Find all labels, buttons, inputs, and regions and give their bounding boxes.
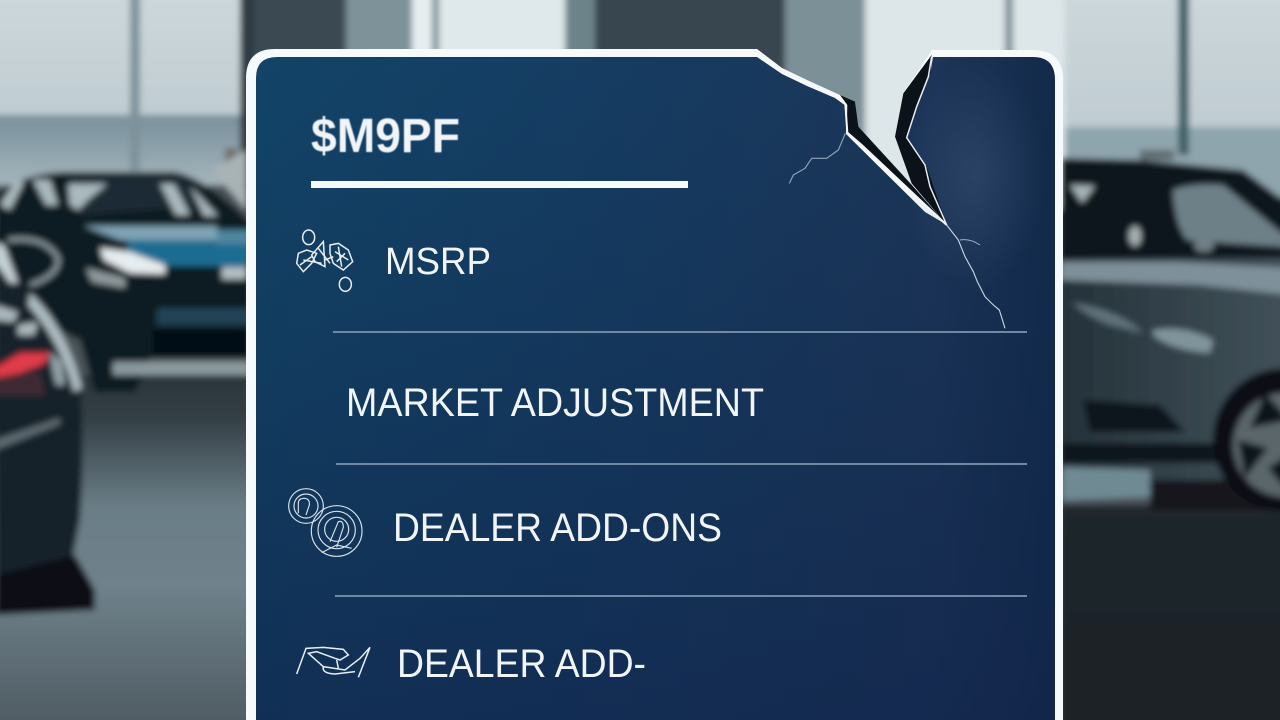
row: dealer add-ons <box>289 489 722 556</box>
title underline <box>311 181 688 188</box>
row: dealer add- (cut off) <box>297 642 646 686</box>
panel: price sheet card with torn corner <box>246 49 1063 720</box>
label: MSRP <box>385 241 491 283</box>
card white frame <box>246 49 1063 720</box>
row: market adjustment label: MARKET ADJUSTMENT <box>346 381 764 425</box>
title: $M9PF <box>311 110 460 163</box>
foreground car left <box>0 240 82 590</box>
icon: scribbled cluster <box>297 230 353 291</box>
label: DEALER ADD- <box>397 642 646 686</box>
card blue surface <box>256 57 1055 720</box>
icon: hand outline <box>297 647 370 677</box>
crack: dark torn edges and fine fractures <box>757 52 1005 328</box>
far car left <box>0 172 250 392</box>
right car <box>1060 158 1280 262</box>
icon: two coins <box>289 489 362 556</box>
row: MSRP <box>297 230 491 291</box>
label: DEALER ADD-ONS <box>393 506 722 550</box>
